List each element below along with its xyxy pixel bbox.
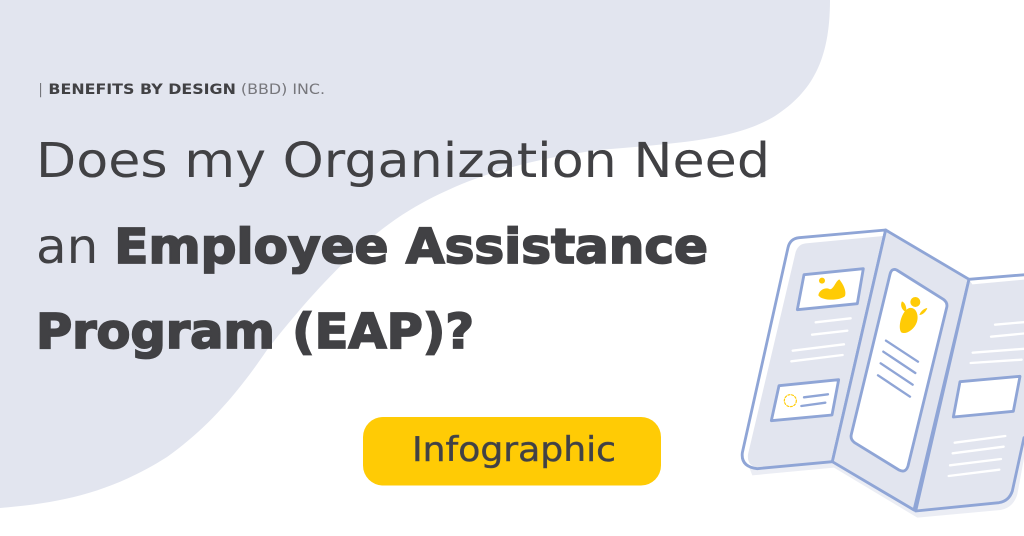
right text lines (971, 322, 1024, 363)
picture card (797, 269, 863, 310)
infographic button (363, 417, 661, 486)
icon: folded brochure (742, 230, 1024, 518)
right lower lines (949, 436, 1005, 476)
title line 3: Program (EAP)? (36, 304, 474, 360)
title line 1: Does my Organization Need (36, 133, 770, 189)
company label: | BENEFITS BY DESIGN (BBD) INC. (38, 82, 325, 98)
right panel (916, 271, 1024, 511)
center panel (832, 230, 969, 510)
small card (771, 380, 839, 421)
background blob (0, 0, 830, 508)
title line 2: an Employee Assistance (36, 219, 708, 275)
infographic button: Infographic (412, 430, 616, 470)
left panel (742, 230, 886, 469)
brochure shadow (747, 416, 1024, 518)
center white card (851, 269, 947, 471)
right card (953, 376, 1020, 417)
text lines (791, 318, 851, 361)
picture blob (818, 278, 845, 300)
person figure (900, 297, 927, 333)
center text lines (878, 341, 918, 397)
